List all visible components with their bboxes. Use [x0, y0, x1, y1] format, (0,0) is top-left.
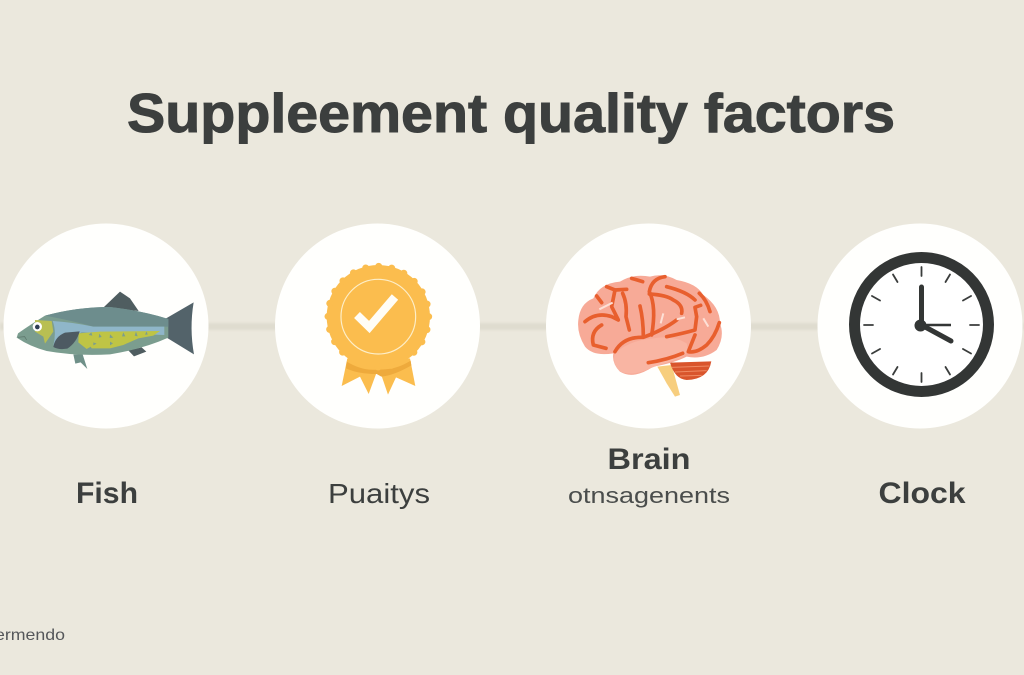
- panel: fish: [4, 224, 208, 510]
- clock circle: [818, 224, 1022, 428]
- icon: fish: [17, 292, 194, 369]
- brain circle: [546, 224, 751, 428]
- fish circle: [4, 224, 208, 428]
- label: otnsagenents: otnsagenents: [568, 483, 730, 508]
- panel: purity badge: [275, 224, 480, 509]
- label: Fish: Fish: [76, 477, 138, 510]
- panel: brain: [546, 224, 751, 508]
- label: Puaitys: Puaitys: [328, 478, 430, 509]
- label: Brain: Brain: [608, 443, 690, 476]
- badge circle: [275, 224, 480, 428]
- title: Suppleement quality factors: [127, 82, 895, 144]
- panel: clock: [818, 224, 1022, 510]
- icon: clock: [854, 258, 988, 392]
- label: Clock: Clock: [878, 477, 966, 510]
- icon: rosette badge: [327, 265, 430, 395]
- icon: brain: [578, 275, 722, 397]
- connector line: [0, 323, 1024, 330]
